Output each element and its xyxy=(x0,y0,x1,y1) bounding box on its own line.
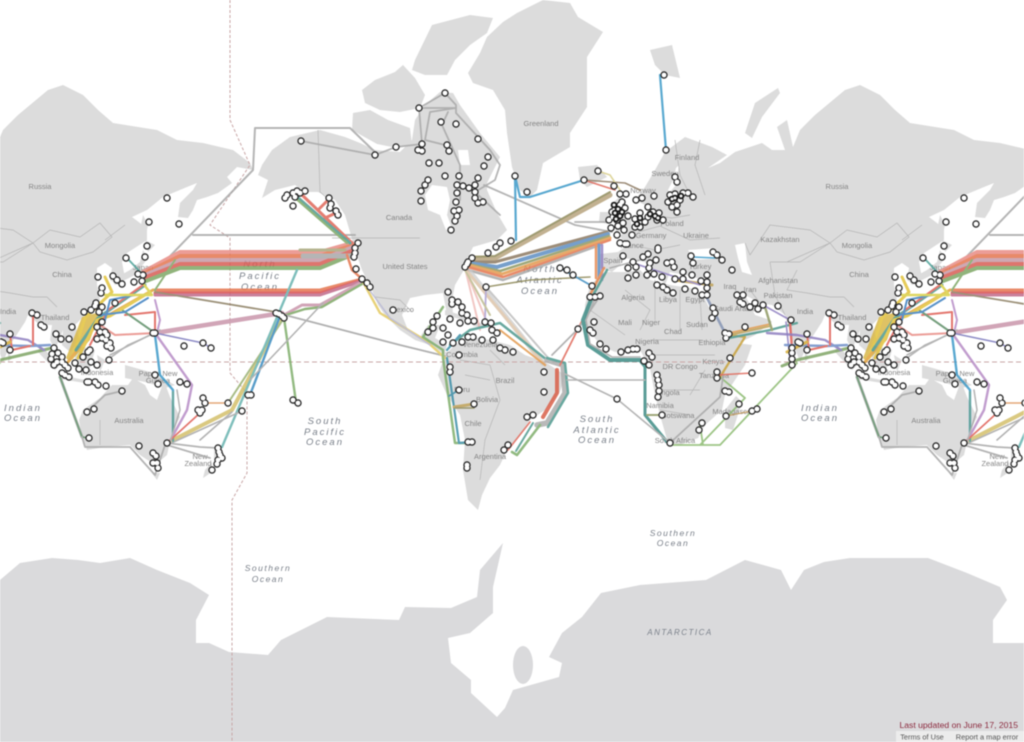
labels: Europe, Africa and Middle East: Botswana xyxy=(662,411,695,420)
labels: Europe, Africa and Middle East: Iraq xyxy=(724,282,736,291)
land: Hudson Bay and Foxe Basin xyxy=(425,150,470,230)
labels: Europe, Africa and Middle East: Germany xyxy=(636,231,667,240)
labels: oceans: Atlantic xyxy=(572,425,621,436)
land: Africa xyxy=(585,270,752,445)
labels: Americas and Greenland xyxy=(382,119,559,461)
labels: oceans: South xyxy=(580,414,614,425)
labels: oceans: Indian xyxy=(4,403,42,414)
cables: Hawaii links xyxy=(155,282,445,402)
labels: Europe, Africa and Middle East: Afghanistan xyxy=(758,276,798,285)
labels: Europe, Africa and Middle East: South Africa xyxy=(655,436,696,445)
footer: last updated note: Last updated on June 17, 2015 xyxy=(899,720,1018,730)
labels: right Asia-Pacific repeat: Russia xyxy=(826,182,849,191)
cable landing stations xyxy=(0,75,1024,470)
labels: Americas and Greenland: Greenland xyxy=(523,119,559,128)
cables: Red Sea to India xyxy=(707,298,797,363)
footer: map links xyxy=(896,731,1024,742)
labels: oceans: Southern xyxy=(245,563,291,573)
labels: left Asia-Pacific xyxy=(0,182,212,468)
labels: right Asia-Pacific repeat: Mongolia xyxy=(842,241,873,250)
labels: oceans: Ocean xyxy=(578,435,616,446)
labels: left Asia-Pacific: Russia xyxy=(29,182,52,191)
labels: Americas and Greenland: United States xyxy=(382,262,428,271)
labels: Europe, Africa and Middle East: Kazakhstan xyxy=(760,235,800,244)
labels: oceans: North xyxy=(243,259,277,270)
cables: trans-Atlantic bundles xyxy=(468,171,640,297)
labels: Europe, Africa and Middle East: Libya xyxy=(659,295,678,304)
labels: oceans: Pacific xyxy=(304,427,346,438)
labels: left Asia-Pacific: Japan xyxy=(133,263,153,272)
labels: oceans: Ocean xyxy=(521,286,559,297)
labels: right Asia-Pacific repeat: Guinea xyxy=(943,376,968,385)
labels: oceans: Atlantic xyxy=(515,275,564,286)
submarine cables xyxy=(0,75,797,475)
cables: Hawaii to Australia xyxy=(167,270,323,447)
labels: left Asia-Pacific: Australia xyxy=(114,416,144,425)
cables: Alaska and US west coast xyxy=(293,193,445,358)
cables: Guam to Australia and Pacific islands xyxy=(100,300,211,443)
labels: Europe, Africa and Middle East: Namibia xyxy=(646,401,675,410)
labels: left Asia-Pacific: Zealand xyxy=(184,459,212,468)
labels: oceans: Ocean xyxy=(241,282,279,293)
labels: Americas and Greenland: Venezuela xyxy=(462,340,498,349)
labels: Europe, Africa and Middle East: Kenya xyxy=(702,357,724,366)
labels: Europe, Africa and Middle East: Poland xyxy=(660,219,684,228)
labels: oceans xyxy=(4,259,839,637)
land: Britain and Iceland xyxy=(578,165,632,232)
labels: right Asia-Pacific repeat: Papua New xyxy=(936,369,975,378)
labels: Americas and Greenland: Brazil xyxy=(496,376,515,385)
cables: East Asia to Southeast Asia xyxy=(66,258,175,362)
cables: north Pacific lower bundle xyxy=(155,279,362,295)
labels: left Asia-Pacific: Indonesia xyxy=(81,368,114,377)
land: Australia xyxy=(79,378,180,465)
labels: Americas and Greenland: Colombia xyxy=(446,350,479,359)
land: Greenland xyxy=(468,0,603,197)
country borders xyxy=(0,130,830,480)
labels: Americas and Greenland: Chile xyxy=(464,419,482,428)
labels: Americas and Greenland: Peru xyxy=(454,385,470,394)
labels: left Asia-Pacific: China xyxy=(52,270,73,279)
land: Black Sea, Caspian and Baltic xyxy=(668,165,752,275)
land: Madagascar xyxy=(725,396,742,430)
labels: right Asia-Pacific repeat: Australia xyxy=(911,416,941,425)
labels: oceans: Ocean xyxy=(657,538,689,548)
labels: Europe, Africa and Middle East: Algeria xyxy=(621,293,645,302)
labels: Europe, Africa and Middle East: France xyxy=(620,241,644,250)
labels: right Asia-Pacific repeat: Japan xyxy=(930,263,950,272)
cables: South America rings xyxy=(423,296,600,455)
land: Svalbard and Novaya Zemlya xyxy=(650,45,780,138)
labels: Europe, Africa and Middle East xyxy=(603,153,800,445)
labels: Europe, Africa and Middle East: Spain xyxy=(603,256,623,265)
footer: map links: Terms of Use xyxy=(900,732,944,742)
labels: Europe, Africa and Middle East: Pakistan xyxy=(764,291,792,300)
cables: Caribbean ring xyxy=(450,323,547,365)
cables: Svalbard and Greenland xyxy=(515,75,666,240)
labels: Europe, Africa and Middle East: Sudan xyxy=(686,320,708,329)
labels: oceans: Ocean xyxy=(252,574,284,584)
labels: right Asia-Pacific repeat: China xyxy=(849,270,870,279)
labels: Europe, Africa and Middle East: Sweden xyxy=(651,169,679,178)
labels: Europe, Africa and Middle East: DR Congo xyxy=(662,362,698,371)
labels: oceans: ANTARCTICA xyxy=(646,628,713,637)
labels: Americas and Greenland: Mexico xyxy=(390,305,414,314)
labels: left Asia-Pacific: Mongolia xyxy=(45,241,76,250)
labels: left Asia-Pacific: India xyxy=(0,307,17,316)
labels: Europe, Africa and Middle East: Madagascar xyxy=(712,407,754,416)
labels: Europe, Africa and Middle East: Ukraine xyxy=(683,231,709,240)
cables: Arctic and Canada xyxy=(147,93,612,280)
land: Southeast Asian and Pacific islands xyxy=(8,215,222,480)
labels: right Asia-Pacific repeat: New xyxy=(989,452,1005,461)
labels: oceans: Ocean xyxy=(801,413,839,424)
labels: Europe, Africa and Middle East: Ethiopia xyxy=(698,338,726,347)
land: Antarctica xyxy=(0,543,1024,742)
land: Berkner Island xyxy=(513,646,533,684)
land: Arctic islands xyxy=(352,15,493,148)
cables: Indian Ocean and Bay of Bengal xyxy=(0,313,52,366)
cables: Australia coast xyxy=(60,330,218,475)
labels: left Asia-Pacific: Thailand xyxy=(41,313,69,322)
labels: left Asia-Pacific: New xyxy=(192,452,208,461)
land: North America xyxy=(258,92,507,355)
labels: oceans: South xyxy=(308,416,342,427)
labels: left Asia-Pacific: Guinea xyxy=(146,376,171,385)
labels: oceans: Ocean xyxy=(306,437,344,448)
labels: oceans: Pacific xyxy=(239,271,281,282)
labels: Europe, Africa and Middle East: Mali xyxy=(618,318,632,327)
labels: Europe, Africa and Middle East: Egypt xyxy=(685,295,706,304)
labels: oceans: Southern xyxy=(650,528,696,538)
labels: Americas and Greenland: Bolivia xyxy=(476,395,499,404)
labels: Europe, Africa and Middle East: Turkey xyxy=(689,262,712,271)
labels: Europe, Africa and Middle East: Tanzania xyxy=(699,371,730,380)
labels: Europe, Africa and Middle East: Finland xyxy=(675,153,699,162)
land: Caribbean islands xyxy=(445,310,488,328)
cables: Mediterranean and Black Sea xyxy=(610,257,715,285)
labels: Europe, Africa and Middle East: Chad xyxy=(664,327,682,336)
labels: right Asia-Pacific repeat: Indonesia xyxy=(878,368,911,377)
labels: Europe, Africa and Middle East: Angola xyxy=(656,388,681,397)
labels: right Asia-Pacific repeat: Zealand xyxy=(981,459,1009,468)
labels: Americas and Greenland: Canada xyxy=(386,213,413,222)
cables: Africa rings xyxy=(563,296,797,445)
labels: Europe, Africa and Middle East: Niger xyxy=(642,318,660,327)
footer: map links: Report a map error xyxy=(956,732,1019,742)
labels: Europe, Africa and Middle East: Nigeria xyxy=(635,337,660,346)
land masses xyxy=(8,0,1024,510)
labels: Europe, Africa and Middle East: Iran xyxy=(744,285,756,294)
labels: right Asia-Pacific repeat xyxy=(797,182,1009,468)
labels: left Asia-Pacific: Papua New xyxy=(139,369,178,378)
cables: Caribbean to Brazil xyxy=(465,268,550,365)
cables: north Pacific upper bundle xyxy=(143,243,354,281)
labels: oceans: Indian xyxy=(801,403,839,414)
labels: oceans: Ocean xyxy=(4,413,42,424)
labels: oceans: North xyxy=(523,264,557,275)
labels: right Asia-Pacific repeat: India xyxy=(797,307,814,316)
labels: right Asia-Pacific repeat: Thailand xyxy=(838,313,866,322)
place labels xyxy=(0,119,1009,637)
labels: Americas and Greenland: Argentina xyxy=(474,452,507,461)
land: Eurasia xyxy=(600,85,1024,362)
labels: Europe, Africa and Middle East: Saudi Arabia xyxy=(714,304,757,313)
labels: Europe, Africa and Middle East: Norway xyxy=(630,186,656,195)
land: South America xyxy=(438,337,565,510)
